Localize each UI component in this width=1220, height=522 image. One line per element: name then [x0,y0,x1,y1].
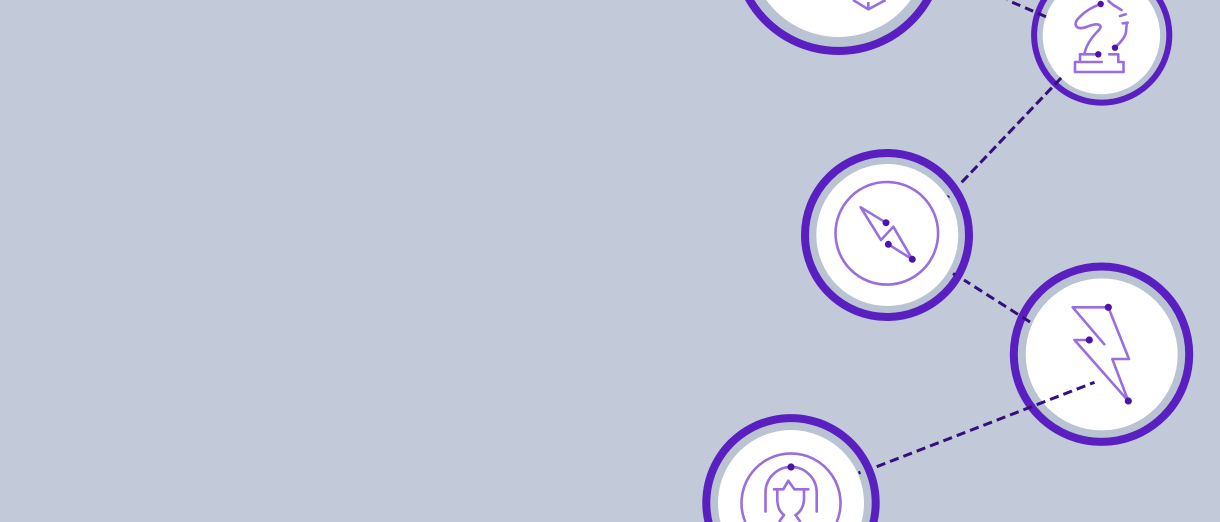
icon: person [742,453,840,522]
dashed connector: top node to knight [1007,0,1046,17]
node: compass [805,153,969,317]
icon: lightning bolt [1073,304,1132,405]
node: chess knight [1031,0,1172,106]
dashed connector: lightning to person [858,382,1094,473]
node: person [702,414,880,522]
icon: knight [1075,1,1128,72]
node: lightning bolt [1014,266,1189,442]
dashed connector: knight to compass [948,77,1062,197]
node: top cube (cropped) [745,0,932,55]
dashed connector: compass to lightning [953,274,1030,322]
icon: compass [836,182,938,285]
